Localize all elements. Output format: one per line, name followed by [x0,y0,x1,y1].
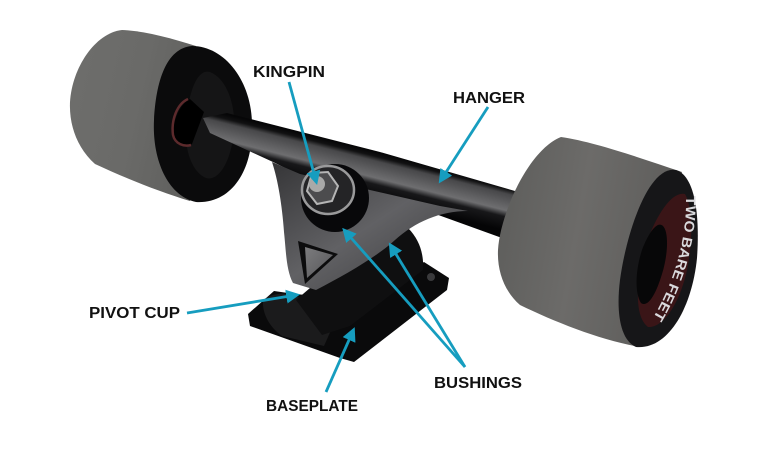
right wheel [498,137,698,348]
label: baseplate: BASEPLATE [266,398,358,415]
label: pivot cup: PIVOT CUP [89,305,180,322]
hanger arm [272,162,468,290]
triangle cut-out [298,241,338,284]
left wheel [70,30,252,202]
arrow: bushings upper [345,231,465,367]
arrow: baseplate [326,331,353,392]
wheel lettering: TWO BARE FEET [654,196,696,322]
truck riser body [296,228,423,335]
label: bushings: BUSHINGS [434,375,522,392]
hanger axle [203,113,515,238]
truck baseplate [248,262,449,362]
arrow: pivot cup [187,295,296,313]
arrow: kingpin [289,82,316,181]
label: hanger: HANGER [453,90,525,107]
arrow: hanger [441,107,488,180]
label: kingpin: KINGPIN [253,64,325,81]
arrow: bushings lower [391,246,465,367]
bushing and kingpin nut [301,164,369,232]
